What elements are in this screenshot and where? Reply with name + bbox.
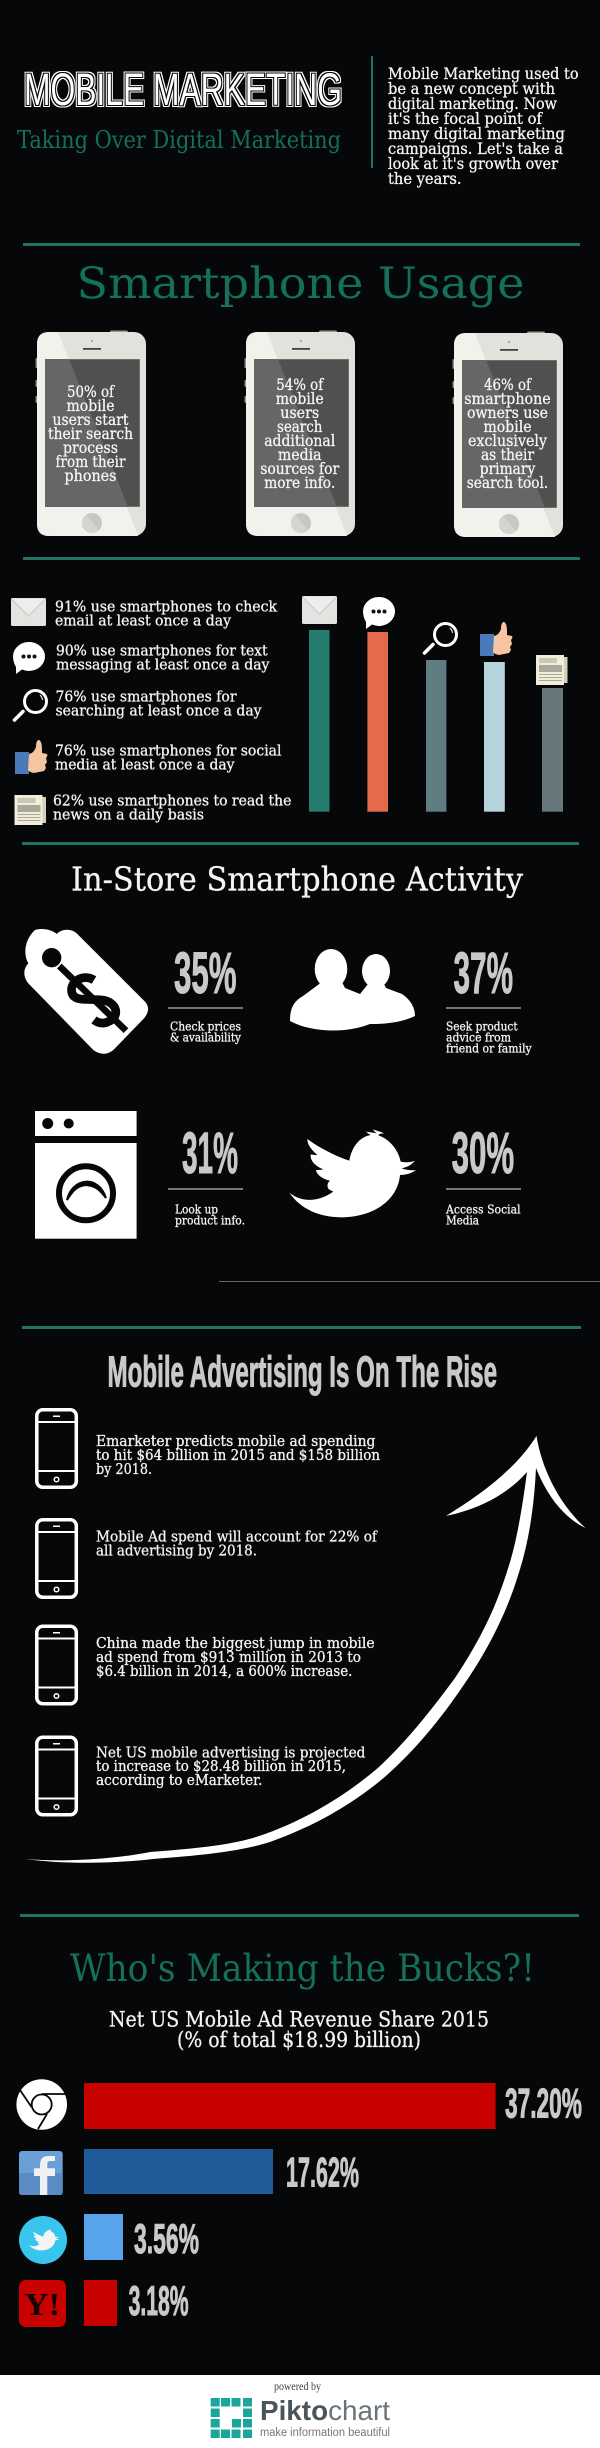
- tagline: make information beautiful: [260, 2427, 390, 2439]
- bar: facebook: [84, 2149, 273, 2194]
- stat: email: email at least once a day: [55, 614, 232, 630]
- phone text 50%: phones: [64, 467, 117, 485]
- advertising fact 1: by 2018.: [96, 1462, 152, 1478]
- caption: Seek product: [446, 1019, 518, 1034]
- intro text: be a new concept with: [388, 80, 555, 98]
- phone text 46%: search tool.: [467, 474, 548, 492]
- advertising fact 4: according to eMarketer.: [96, 1773, 262, 1789]
- advertising fact 2: Mobile Ad spend will account for 22% of: [96, 1530, 379, 1546]
- stat: email: 91% use smartphones to check: [55, 600, 277, 616]
- advertising fact 1: [96, 1434, 380, 1478]
- stat: 30%: [445, 1121, 521, 1227]
- icon: phone outline 4: [37, 1737, 76, 1815]
- title: MOBILE MARKETING: [24, 64, 342, 115]
- piktochart wordmark: Piktochart: [260, 2395, 390, 2426]
- stat: 31%: 31%: [182, 1121, 238, 1186]
- caption: product info.: [175, 1212, 245, 1227]
- phone text 46%: primary: [480, 460, 535, 478]
- stat: social media: 76% use smartphones for social: [55, 744, 282, 760]
- phone text 46%: as their: [481, 446, 535, 464]
- phone text 46%: exclusively: [468, 432, 547, 450]
- icon: speech bubble: [13, 642, 45, 674]
- advertising fact 2: all advertising by 2018.: [96, 1544, 257, 1560]
- bar chart: revenue share: [16, 2079, 582, 2327]
- phone text 50%: their search: [48, 425, 133, 443]
- panel: phone 46%: [452, 332, 563, 537]
- icon: twitter bird: [289, 1129, 416, 1217]
- caption: friend or family: [446, 1041, 533, 1056]
- caption: [175, 1201, 245, 1227]
- stat: 37%: 37%: [454, 941, 513, 1006]
- caption: & availability: [170, 1030, 242, 1045]
- bar icon: newspaper: [536, 655, 568, 685]
- stat: 37%: [446, 941, 533, 1056]
- icon: facebook: [19, 2151, 63, 2195]
- bar: yahoo: [84, 2280, 117, 2326]
- intro text: digital marketing. Now: [388, 95, 558, 113]
- phone text 54%: 54% of: [276, 376, 324, 394]
- stat: 30%: 30%: [452, 1121, 514, 1186]
- heading: in-store activity: In-Store Smartphone Activity: [71, 860, 523, 899]
- phone text 54%: search: [277, 418, 322, 436]
- icon: yahoo: [19, 2280, 66, 2327]
- advertising fact 4: Net US mobile advertising is projected: [96, 1745, 365, 1761]
- phone text 46%: smartphone: [464, 390, 551, 408]
- caption: Access Social: [445, 1201, 521, 1216]
- phone text 50%: 50% of: [67, 383, 115, 401]
- subtitle: Taking Over Digital Marketing: [17, 126, 341, 154]
- heading: who's making the bucks: Who's Making the Bucks?!: [70, 1947, 535, 1990]
- icon: price tag: [24, 929, 148, 1054]
- caption: Media: [446, 1212, 479, 1227]
- value: 17.62%: 17.62%: [286, 2149, 359, 2196]
- bar chart: daily usage: [302, 596, 568, 812]
- stat: news: [53, 794, 291, 824]
- phone text 54%: more info.: [264, 474, 335, 492]
- bar: google: [84, 2083, 496, 2129]
- phone text 46%: 46% of: [484, 376, 532, 394]
- caption: [446, 1019, 533, 1056]
- stat: text messaging: 90% use smartphones for text: [56, 644, 268, 660]
- stat: news: news on a daily basis: [53, 808, 204, 824]
- chart subtitle: Net US Mobile Ad Revenue Share 2015: [109, 2008, 489, 2032]
- advertising fact 1: to hit $64 billion in 2015 and $158 billion: [96, 1448, 380, 1464]
- intro text: Mobile Marketing used to: [388, 65, 579, 83]
- advertising fact 4: [96, 1745, 365, 1789]
- icon: twitter badge: [19, 2216, 67, 2264]
- stat: 31%: [168, 1121, 245, 1227]
- icon: phone outline 3: [37, 1626, 76, 1704]
- panel: phone 54%: [244, 330, 355, 536]
- caption: [445, 1201, 521, 1227]
- stat: 35%: 35%: [174, 941, 236, 1006]
- arrow: rising curve: [26, 1436, 586, 1863]
- stat: social media: media at least once a day: [55, 758, 235, 774]
- powered by: powered by: [274, 2379, 321, 2393]
- stat: searching: [56, 690, 262, 720]
- value: 3.18%: 3.18%: [129, 2277, 189, 2324]
- icon: washing machine: [35, 1111, 137, 1239]
- value: 3.56%: 3.56%: [134, 2215, 199, 2262]
- phone text 54%: [260, 376, 340, 492]
- icon: newspaper: [14, 795, 46, 825]
- bar: social media: [484, 662, 505, 812]
- stat: news: 62% use smartphones to read the: [53, 794, 291, 810]
- bar icon: magnifier: [424, 624, 456, 653]
- phone text 54%: sources for: [260, 460, 340, 478]
- caption: advice from: [446, 1030, 511, 1045]
- panel: daily usage list: [11, 598, 291, 825]
- icon: two people: [290, 949, 415, 1030]
- phone text 50%: [48, 383, 133, 485]
- advertising fact 3: China made the biggest jump in mobile: [96, 1636, 375, 1652]
- chart subtitle: [109, 2008, 489, 2052]
- stat: social media: [55, 744, 282, 774]
- phone text 50%: users start: [52, 411, 129, 429]
- advertising fact 3: $6.4 billion in 2014, a 600% increase.: [96, 1664, 352, 1680]
- icon: thumbs up: [15, 740, 47, 774]
- icon: piktochart logo: [211, 2398, 252, 2438]
- icon: envelope: [11, 598, 46, 626]
- phone text 50%: from their: [56, 453, 126, 471]
- bar icon: envelope: [302, 596, 337, 624]
- stat: searching: 76% use smartphones for: [56, 690, 237, 706]
- phone text 54%: users: [280, 404, 319, 422]
- phone text 54%: mobile: [276, 390, 324, 408]
- phone text 46%: [464, 376, 551, 492]
- intro text: the years.: [388, 170, 462, 188]
- stat: text messaging: [56, 644, 270, 674]
- bar: text messaging: [367, 632, 388, 812]
- caption: Look up: [175, 1201, 218, 1216]
- bar icon: speech bubble: [363, 597, 395, 629]
- intro text: campaigns. Let's take a: [388, 140, 563, 158]
- icon: yahoo: Y!: [24, 2286, 60, 2322]
- bar: email: [309, 630, 330, 812]
- heading: smartphone usage: Smartphone Usage: [76, 259, 524, 309]
- phone text 50%: process: [63, 439, 118, 457]
- stat: email: [55, 600, 277, 630]
- phone text 54%: additional: [264, 432, 335, 450]
- bar: twitter: [84, 2214, 123, 2260]
- bar: news: [542, 688, 563, 812]
- icon: magnifier: [14, 690, 46, 720]
- advertising fact 3: ad spend from $913 million in 2013 to: [96, 1650, 361, 1666]
- bar icon: thumbs up: [480, 622, 512, 656]
- footer: [0, 2375, 600, 2448]
- icon: phone outline 2: [37, 1520, 76, 1597]
- intro text: look at it's growth over: [388, 155, 559, 173]
- panel: phone 50%: [36, 330, 146, 536]
- icon: phone outline 1: [37, 1410, 76, 1487]
- phone text 50%: mobile: [66, 397, 114, 415]
- advertising fact 1: Emarketer predicts mobile ad spending: [96, 1434, 375, 1450]
- intro text: many digital marketing: [388, 125, 565, 143]
- stat: searching: searching at least once a day: [56, 704, 262, 720]
- bar: searching: [426, 660, 446, 812]
- stat: text messaging: messaging at least once a day: [56, 658, 270, 674]
- advertising fact 2: [96, 1530, 379, 1560]
- caption: Check prices: [170, 1019, 241, 1034]
- phone text 46%: mobile: [484, 418, 532, 436]
- phone text 46%: owners use: [467, 404, 548, 422]
- intro divider: [371, 56, 373, 168]
- stat: 35%: [168, 941, 243, 1045]
- intro text: [388, 65, 579, 188]
- advertising fact 3: [96, 1636, 375, 1680]
- advertising fact 4: to increase to $28.48 billion in 2015,: [96, 1759, 346, 1775]
- intro text: it's the focal point of: [388, 110, 543, 128]
- icon: chrome: [16, 2079, 67, 2130]
- phone text 54%: media: [278, 446, 322, 464]
- caption: [170, 1019, 242, 1045]
- chart subtitle: (% of total $18.99 billion): [177, 2028, 421, 2052]
